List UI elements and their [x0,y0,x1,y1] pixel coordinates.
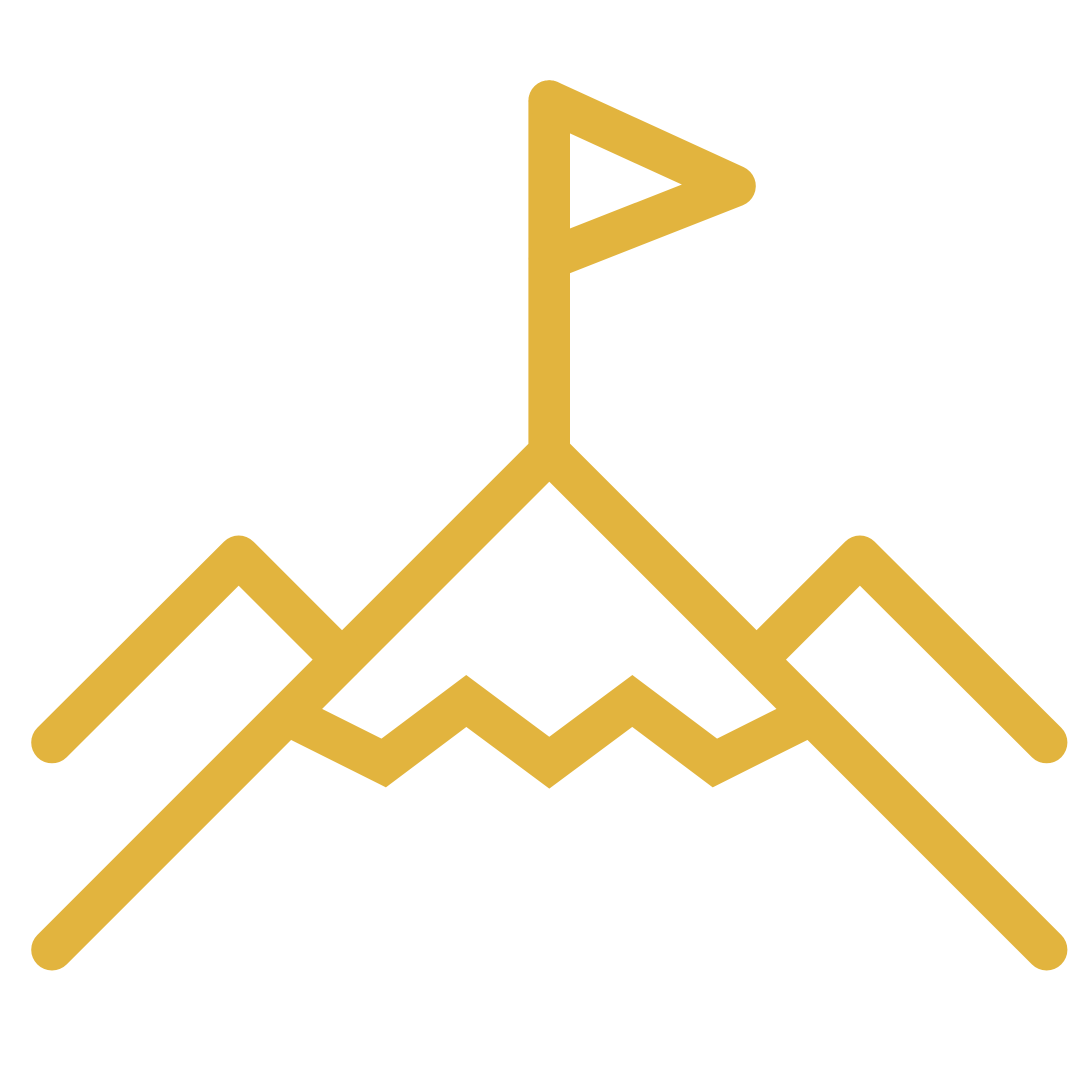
icon: flag [549,101,735,259]
icon: right mountain slope [757,556,1047,742]
icon: left mountain slope [52,556,342,742]
icon: flag pole [528,101,570,452]
icon: central mountain outline [52,452,1047,950]
icon: snow line [287,701,812,763]
